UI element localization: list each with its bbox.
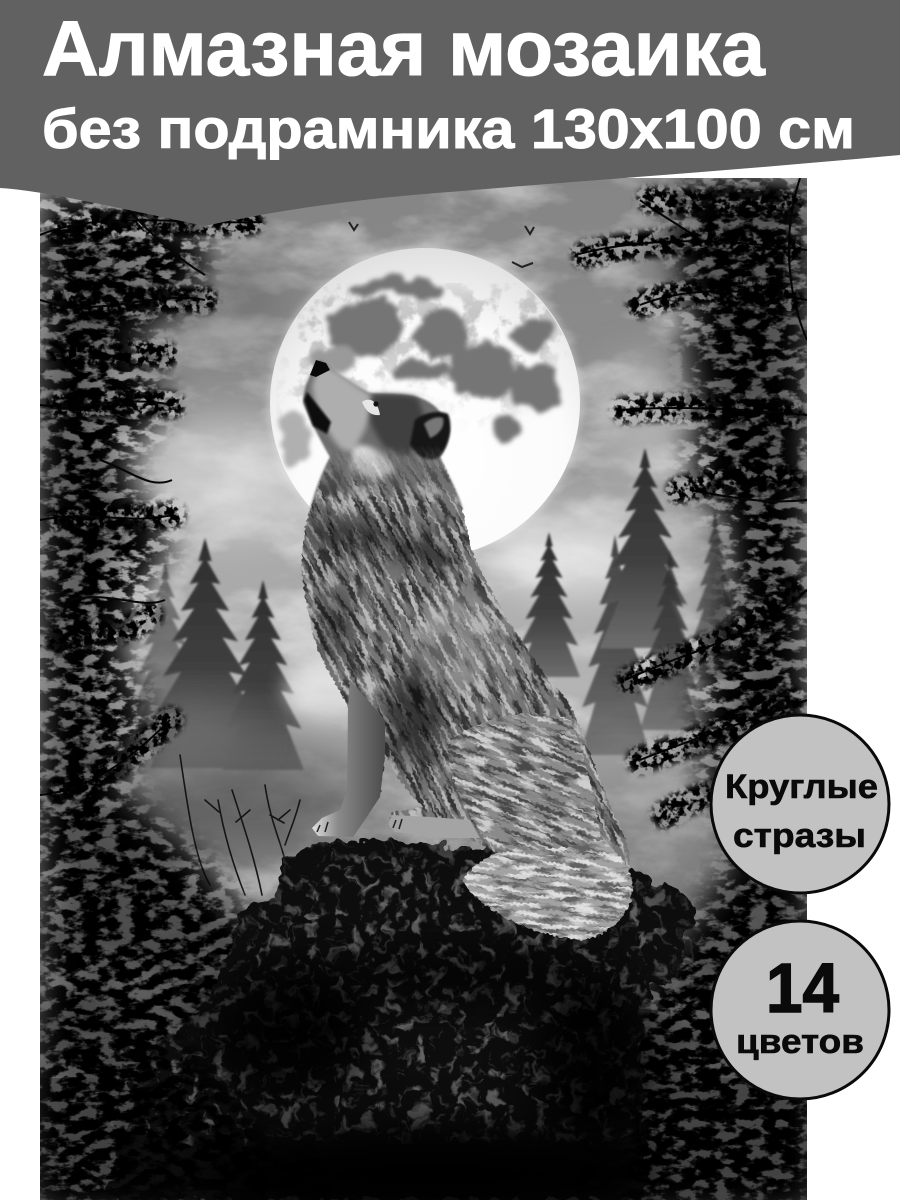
wolf chest highlight: [415, 590, 505, 690]
wolf head: [303, 360, 463, 510]
wolf haunch: [446, 712, 601, 853]
ground mist and shadow: [110, 660, 720, 860]
full moon: [268, 246, 582, 560]
rock: [110, 838, 695, 1200]
right tree foliage: [600, 178, 807, 1200]
wolf tail: [462, 837, 634, 941]
wolf legs and paws: [312, 680, 480, 838]
badge: 14 colours: [711, 921, 889, 1099]
wild plants: [180, 755, 300, 895]
distant pines: [130, 448, 740, 770]
badge: round rhinestones: [711, 715, 889, 893]
foreground foliage: [40, 987, 807, 1200]
wolf: [300, 447, 634, 941]
badge: round rhinestones: стразы: [733, 817, 866, 855]
badge: round rhinestones: Круглые: [725, 768, 878, 806]
wolf body shadows: [304, 502, 470, 782]
header banner: [0, 0, 900, 226]
badge: 14 colours: 14: [766, 949, 839, 1027]
badge: 14 colours: цветов: [736, 1023, 864, 1061]
wolf body fur: [300, 447, 631, 872]
right tree branches: [575, 178, 807, 815]
left tree foliage: [40, 192, 268, 1200]
title: Алмазная мозаика: [42, 4, 766, 92]
illustration: howling wolf: [40, 178, 807, 1200]
birds: [349, 222, 534, 267]
left tree branches: [40, 200, 262, 795]
night sky with clouds: [40, 178, 807, 1200]
subtitle: без подрамника 130х100 см: [42, 97, 855, 160]
